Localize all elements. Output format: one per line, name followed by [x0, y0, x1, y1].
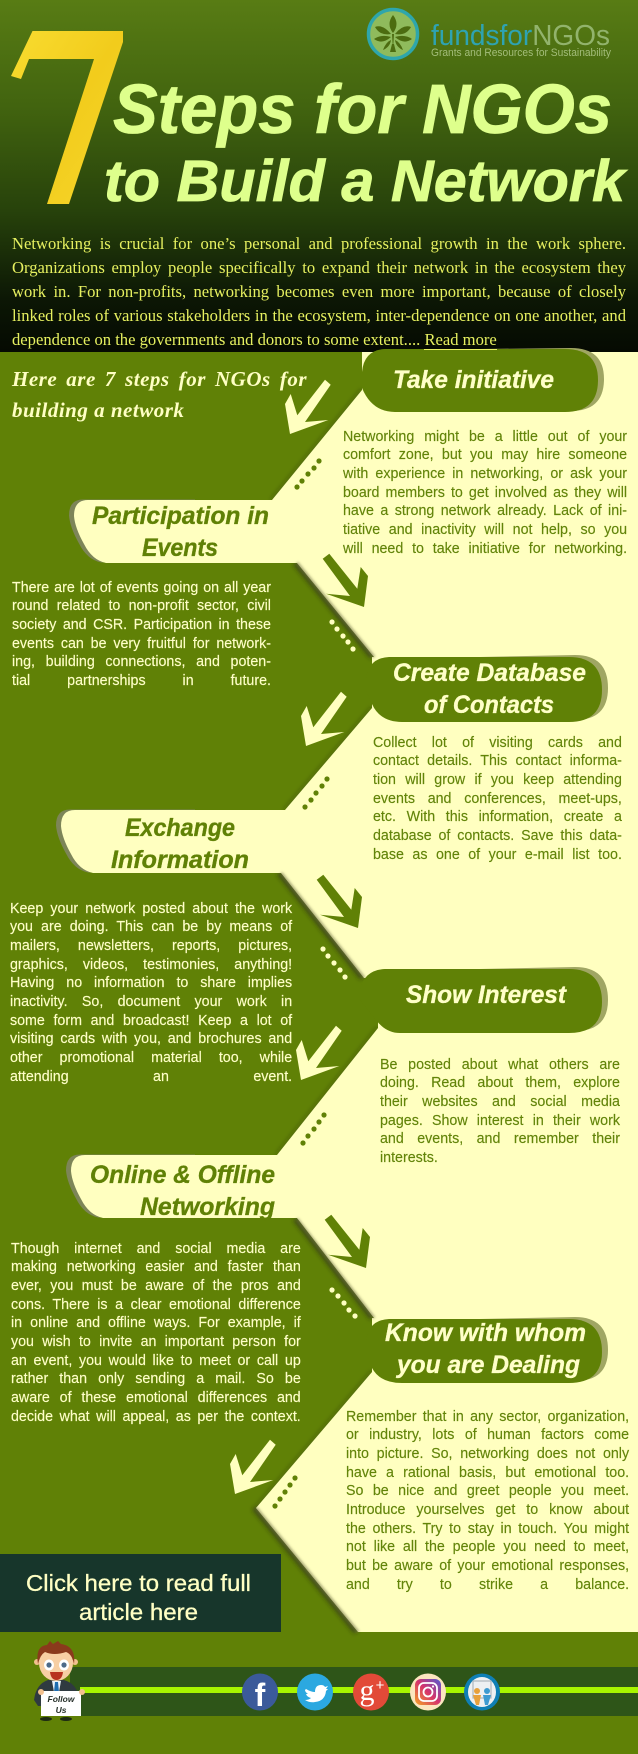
- text: Online and Offline Networking: ever, you must be aware of the pros and: [11, 1277, 301, 1294]
- text: Show Interest: pages. Show interest in their work: [380, 1112, 620, 1129]
- pill: Know with whom you are Dealing: [366, 1319, 602, 1383]
- text: Create Database of Contacts: events and conferences, meet-ups,: [373, 790, 622, 807]
- big yellow numeral 7: [11, 31, 123, 204]
- text: Show Interest: interests.: [380, 1149, 438, 1166]
- pill: Create Database of Contacts: of Contacts: [424, 691, 554, 719]
- text: Know with whom you are Dealing: [346, 1408, 630, 1593]
- text: Take initiative: will need to take initiative for networking.: [343, 540, 627, 557]
- icon: Instagram: [410, 1674, 446, 1710]
- pill: Show Interest: [360, 969, 602, 1033]
- text: Participation in Events: round related to non-profit sector, civil: [12, 597, 271, 614]
- logo: fundsforNGOs: Grants and Resources for Sustainability: [431, 47, 611, 59]
- dotted connector 1: [294, 458, 322, 490]
- text: Know with whom you are Dealing: Introduce yourselves get to know about: [346, 1501, 629, 1518]
- pill: Participation in Events: Events: [142, 534, 218, 562]
- text: Create Database of Contacts: Collect lot of visiting cards and: [373, 734, 622, 750]
- title: Steps for NGOs: [113, 70, 612, 148]
- text: Know with whom you are Dealing: or industry, lots of human factors come: [346, 1426, 629, 1443]
- call to action box: article here: [79, 1599, 198, 1625]
- cream zigzag panel: [61, 352, 638, 1632]
- icon: SlideShare: [464, 1674, 500, 1710]
- pill: Participation in Events: [92, 502, 269, 562]
- text: Online and Offline Networking: Though internet and social media are: [11, 1240, 301, 1256]
- intro paragraph: Organizations employ people specifically to expand their network in the ecosystem they: [12, 258, 626, 277]
- lead-in heading: Here are 7 steps for NGOs for: [12, 367, 307, 391]
- icon: Facebook: [242, 1674, 278, 1713]
- intro paragraph: [12, 234, 626, 350]
- text: Online and Offline Networking: an event, you would like to meet or call up: [11, 1352, 301, 1369]
- text: Online and Offline Networking: you wish to invite an important person for: [11, 1333, 301, 1350]
- text: Take initiative: comfort zone, but you may hire someone: [343, 446, 627, 463]
- arrow: green 2: [323, 554, 368, 607]
- text: Exchange Information: Having no information to share implies: [10, 974, 292, 991]
- text: Participation in Events: society and CSR. Participation in these: [12, 616, 271, 633]
- arrow: green 6: [325, 1215, 370, 1268]
- arrow: cream 7: [230, 1440, 276, 1494]
- text: Create Database of Contacts: contact details. This contact informa-: [373, 752, 622, 769]
- text: Online and Offline Networking: [11, 1240, 301, 1425]
- pill: Online and Offline Networking: [90, 1161, 275, 1221]
- text: Exchange Information: inactivity. So, document your work in: [10, 993, 292, 1010]
- pill: Exchange Information: [111, 814, 249, 874]
- text: Show Interest: [380, 1056, 620, 1166]
- cream pill shadows: [56, 500, 195, 1218]
- text: Take initiative: have a strong network already. Lack of ini-: [343, 502, 627, 519]
- green pill shadows: [480, 348, 608, 1383]
- text: Know with whom you are Dealing: have a rational basis, but emotional too.: [346, 1464, 629, 1481]
- dotted connector 2: [329, 619, 356, 652]
- text: Show Interest: doing. Read about them, explore: [380, 1074, 620, 1091]
- diagonal shadows: [254, 390, 378, 1632]
- text: Know with whom you are Dealing: not like all the people you need to meet,: [346, 1538, 629, 1555]
- lead-in heading: [12, 367, 307, 422]
- text: Exchange Information: you are doing. This can be by means of: [10, 918, 292, 935]
- text: Create Database of Contacts: [373, 734, 622, 863]
- pill: Exchange Information: Information: [111, 846, 249, 874]
- text: Online and Offline Networking: aware of these emotional differences and: [11, 1389, 301, 1406]
- icon: Google Plus: +: [376, 1677, 385, 1694]
- intro paragraph: linked roles of various stakeholders in the ecosystem, inter-dependence on one another, and: [12, 306, 626, 325]
- social band: [70, 1667, 638, 1716]
- dotted connector 5: [300, 1112, 327, 1146]
- pill: Participation in Events: Participation in: [92, 502, 269, 530]
- text: Participation in Events: events can be very fruitful for network-: [12, 635, 271, 652]
- text: Know with whom you are Dealing: into picture. So, networking does not only: [346, 1445, 629, 1462]
- pill: Show Interest: Show Interest: [406, 981, 568, 1009]
- text: Exchange Information: other promotional material too, while: [10, 1049, 292, 1066]
- dotted connector 6: [329, 1287, 358, 1319]
- dotted connector 4: [320, 946, 348, 980]
- text: Create Database of Contacts: base as one of your e-mail list too.: [373, 846, 622, 863]
- mascot holding Follow Us sign: [34, 1641, 85, 1721]
- header background: [0, 0, 638, 352]
- pill: Know with whom you are Dealing: you are Dealing: [395, 1351, 580, 1379]
- arrow: green 4: [317, 875, 362, 928]
- text: Exchange Information: graphics, videos, testimonies, anything!: [10, 956, 292, 973]
- text: Participation in Events: tial partnerships in future.: [12, 672, 271, 689]
- main green background: [0, 352, 638, 1754]
- text: Exchange Information: attending an event.: [10, 1068, 292, 1085]
- text: Exchange Information: Keep your network posted about the work: [10, 900, 292, 916]
- mascot holding Follow Us sign: Us: [56, 1705, 67, 1715]
- text: Create Database of Contacts: tion will grow if you keep attending: [373, 771, 622, 788]
- text: Exchange Information: [10, 900, 292, 1085]
- icon: Google Plus: g: [360, 1674, 374, 1707]
- icon: Google Plus: [353, 1674, 389, 1710]
- text: Online and Offline Networking: making networking easier and faster than: [11, 1258, 301, 1275]
- text: Online and Offline Networking: rather than only sending a mail. So be: [11, 1370, 301, 1387]
- text: Take initiative: Networking might be a little out of your: [343, 428, 627, 444]
- text: Participation in Events: ing, building connections, and poten-: [12, 653, 271, 670]
- text: Know with whom you are Dealing: and try to strike a balance.: [346, 1576, 629, 1593]
- text: Know with whom you are Dealing: but be aware of your emotional responses,: [346, 1557, 629, 1574]
- text: Online and Offline Networking: cons. There is a clear emotional difference: [11, 1296, 301, 1313]
- text: Take initiative: tiative and inactivity will not help, so you: [343, 521, 627, 538]
- text: Online and Offline Networking: decide what will appeal, as per the context.: [11, 1408, 301, 1425]
- pill: Online and Offline Networking: Networking: [140, 1193, 275, 1221]
- soft edge over cream: [256, 563, 374, 1632]
- text: Know with whom you are Dealing: Remember that in any sector, organization,: [346, 1408, 629, 1424]
- arrow: cream 5: [296, 1026, 342, 1080]
- text: Take initiative: with experience in networking, or ask your: [343, 465, 627, 482]
- text: Participation in Events: [12, 578, 271, 689]
- text: Online and Offline Networking: in online and offline ways. For example, if: [11, 1314, 301, 1331]
- pill: Take initiative: [362, 349, 598, 412]
- arrow: cream 1: [285, 380, 331, 434]
- intro paragraph: work in. For non-profits, networking becomes even more important, because of closely: [12, 282, 626, 301]
- text: Take initiative: board members to get involved as they will: [343, 484, 627, 501]
- text: Exchange Information: some form and broadcast! Keep a lot of: [10, 1012, 292, 1029]
- pill: Create Database of Contacts: [366, 657, 602, 722]
- call to action box: Click here to read full: [26, 1570, 251, 1596]
- intro paragraph: Networking is crucial for one’s personal and professional growth in the work sphere.: [12, 234, 626, 253]
- intro paragraph: dependence on the governments and donors to some extent.... Read more: [12, 330, 497, 349]
- text: Participation in Events: There are lot of events going on all year: [12, 578, 271, 596]
- text: Show Interest: and events, and remember their: [380, 1130, 620, 1147]
- mascot holding Follow Us sign: Follow: [48, 1694, 76, 1704]
- text: Create Database of Contacts: database of contacts. Save this data-: [373, 827, 622, 844]
- text: Take initiative: [342, 428, 627, 557]
- pill: Online and Offline Networking: Online & Offline: [90, 1161, 275, 1189]
- dotted connector 3: [302, 776, 330, 810]
- arrow: cream 3: [301, 692, 347, 746]
- title: to Build a Network: [104, 149, 628, 214]
- pill: Know with whom you are Dealing: Know with whom: [385, 1319, 586, 1347]
- text: Show Interest: their websites and social media: [380, 1093, 620, 1110]
- text: Show Interest: Be posted about what others are: [380, 1056, 620, 1072]
- text: Know with whom you are Dealing: So be nice and greet people you meet.: [346, 1482, 629, 1499]
- call to action box: [0, 1554, 281, 1632]
- icon: Twitter: [297, 1674, 333, 1710]
- title: [104, 70, 628, 214]
- logo: fundsforNGOs: fundsforNGOs: [431, 20, 610, 52]
- text: Exchange Information: mailers, newsletters, reports, pictures,: [10, 937, 292, 954]
- text: Exchange Information: visiting cards with you, and brochures and: [10, 1030, 292, 1047]
- logo: fundsforNGOs: [368, 10, 611, 59]
- pill: Exchange Information: Exchange: [125, 814, 235, 842]
- dotted connector 7: [272, 1475, 298, 1509]
- icon: Facebook: f: [255, 1677, 266, 1713]
- lead-in heading: building a network: [12, 398, 184, 422]
- pill: Take initiative: Take initiative: [393, 366, 554, 394]
- text: Create Database of Contacts: etc. With this information, create a: [373, 808, 622, 825]
- text: Know with whom you are Dealing: the others. Try to stay in touch. You might: [346, 1520, 629, 1537]
- pill: Create Database of Contacts: Create Database: [393, 659, 586, 687]
